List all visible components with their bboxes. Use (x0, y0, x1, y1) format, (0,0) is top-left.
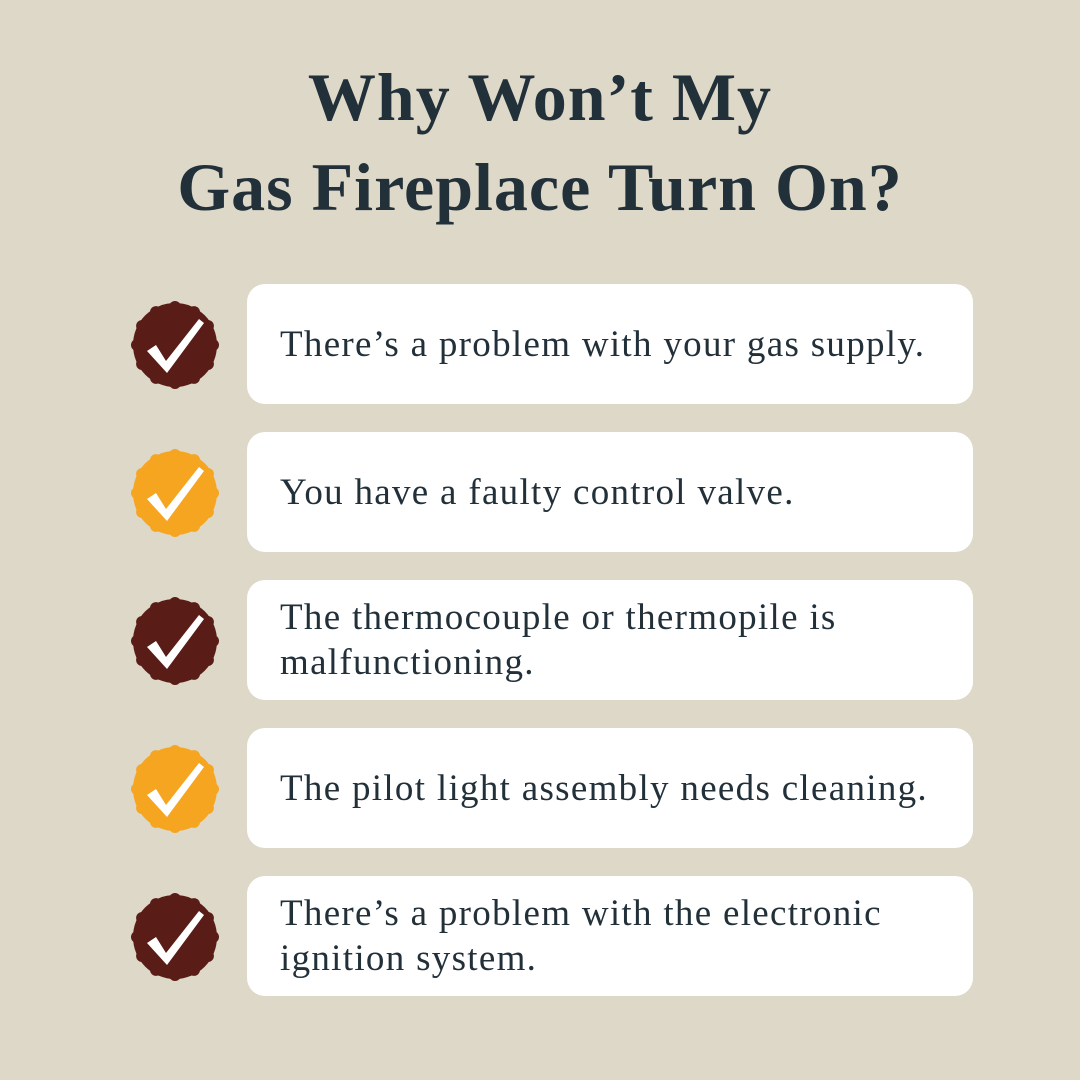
icon: check badge 1 (131, 301, 219, 389)
card 3: The thermocouple or thermopile is (280, 597, 837, 638)
card 2: You have a faulty control valve. (280, 472, 795, 512)
card 3: malfunctioning. (280, 642, 535, 683)
card 5 (247, 876, 973, 996)
card 2 (247, 432, 973, 552)
card 3 (247, 580, 973, 700)
card 1: There’s a problem with your gas supply. (280, 324, 925, 364)
title: Why Won’t My (308, 59, 772, 135)
title: Gas Fireplace Turn On? (177, 149, 903, 225)
icon: check badge 2 (131, 449, 219, 537)
icon: check badge 5 (131, 893, 219, 981)
card 4: The pilot light assembly needs cleaning. (280, 768, 928, 808)
card 5: ignition system. (280, 938, 537, 979)
card 1 (247, 284, 973, 404)
icon: check badge 4 (131, 745, 219, 833)
card 4 (247, 728, 973, 848)
title (177, 59, 903, 225)
icon: check badge 3 (131, 597, 219, 685)
card 5: There’s a problem with the electronic (280, 893, 882, 934)
